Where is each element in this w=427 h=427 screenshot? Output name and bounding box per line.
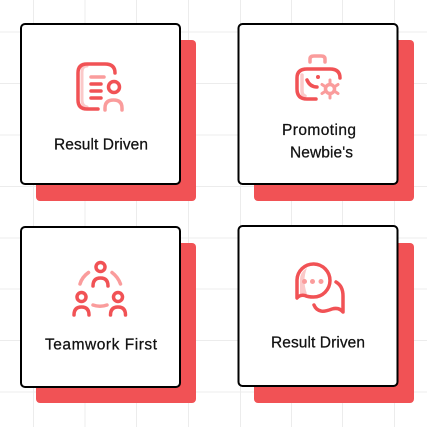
label: result driven: Result Driven: [271, 334, 365, 352]
label: promoting newbie's: Promoting: [282, 122, 356, 139]
label: teamwork first: Teamwork First: [45, 336, 158, 354]
icon: document with person: [78, 64, 122, 110]
icon: chat bubbles: [297, 264, 343, 312]
panel: promoting newbie's: Newbie's: [290, 144, 353, 162]
icon: three people in a circle: [74, 262, 126, 315]
panel: result driven top left: [21, 24, 196, 201]
panel: teamwork first: [21, 227, 196, 403]
panel: result driven bottom right: [238, 226, 414, 403]
icon: briefcase with gear: [297, 56, 340, 99]
label: result driven: Result Driven: [54, 136, 148, 154]
panel: promoting newbie's: [238, 24, 414, 201]
